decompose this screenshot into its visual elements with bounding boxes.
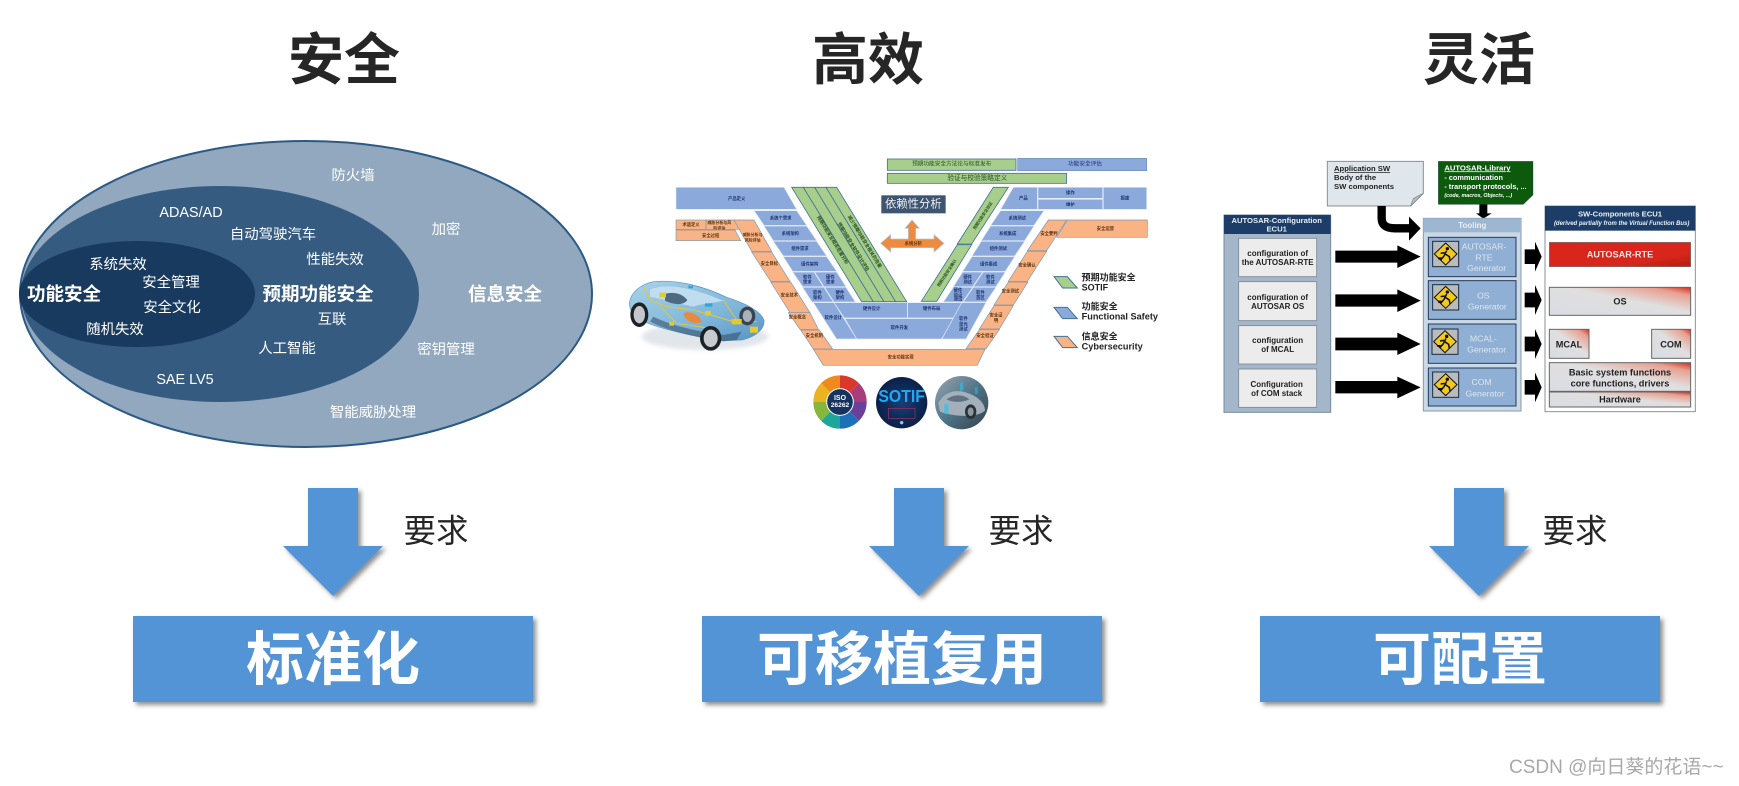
ellipse labels: 互联 — [318, 311, 346, 328]
note: application SW — [1327, 161, 1423, 206]
note: application SW: Body of the — [1334, 173, 1376, 182]
orange right strips — [966, 220, 1147, 349]
green diagonal right strips: 预期功能安全确认 — [935, 258, 957, 288]
blue right: test strips: 软件 — [986, 274, 995, 279]
blue right: test strips: 维护 — [1066, 201, 1075, 208]
ellipse labels: SAE LV5 — [156, 372, 214, 388]
blue left: product definition and requirements: 架构 — [813, 293, 822, 300]
icon: ISO 26262 badge: ISO — [834, 395, 847, 402]
blue left: product definition and requirements: 软件 — [803, 274, 812, 279]
orange left strips: 安全概念 — [789, 313, 807, 320]
green diagonal left strips — [792, 187, 907, 302]
ellipse labels: 安全文化 — [143, 298, 201, 316]
ECU1 component stack: COM — [1660, 339, 1682, 349]
label: 要求 1: 要求 — [403, 513, 469, 549]
blue right: test strips: 验证 — [954, 291, 963, 298]
ECU1 component stack: MCAL — [1556, 339, 1583, 349]
box: 可移植复用 — [702, 616, 1102, 702]
arrow: 灵活 requirement — [1429, 488, 1529, 596]
panel: tooling generators: Generator — [1467, 263, 1506, 273]
inner ellipse: 功能安全 — [19, 241, 255, 347]
orange left strips: 安全功能实现 — [888, 353, 914, 360]
blue right: test strips: 单元 — [959, 320, 968, 327]
blue right: test strips: 首区 — [976, 293, 985, 300]
blue right: test strips: 软件 — [959, 316, 968, 321]
panel: SW components — [1525, 206, 1695, 412]
blue left: product definition and requirements: 架构 — [836, 293, 845, 300]
box: 标准化 — [133, 616, 533, 702]
orange right strips: 安全确认 — [1018, 261, 1036, 268]
panel: AUTOSAR configuration: configuration — [1252, 336, 1303, 345]
box: 可配置 — [1260, 616, 1660, 702]
blue left: product definition and requirements: 软件开发 — [891, 324, 909, 331]
legend — [1054, 272, 1159, 352]
panel: AUTOSAR configuration: Configuration — [1250, 380, 1303, 389]
blue right: test strips: 测试 — [986, 278, 995, 285]
middle ellipse: 预期功能安全 — [21, 186, 419, 402]
title: 高效: 高效 — [812, 28, 924, 92]
legend: 功能安全 — [1082, 300, 1118, 311]
panel: tooling generators: AUTOSAR- — [1462, 242, 1506, 252]
panel: tooling generators: Tooling — [1458, 221, 1487, 230]
panel: AUTOSAR configuration: AUTOSAR OS — [1251, 302, 1305, 311]
blue right: test strips: 软件 — [976, 290, 985, 295]
blue left: product definition and requirements: 系统架构 — [782, 230, 800, 237]
icon: electric car — [629, 281, 768, 351]
orange left strips: 安全过程 — [702, 232, 720, 239]
blue left: product definition and requirements: 硬件布局 — [923, 305, 941, 312]
blue left: product definition and requirements: 需求 — [826, 278, 835, 285]
arrow: 高效 requirement — [869, 488, 969, 596]
panel: tooling generators — [1423, 218, 1521, 411]
blue right: test strips: 测试 — [954, 295, 963, 302]
panel: tooling generators: Generator — [1466, 388, 1505, 398]
icon: SOTIF badge: SOTIF — [878, 386, 925, 406]
ECU1 component stack: Hardware — [1599, 394, 1641, 404]
orange right strips: 安全验证 — [976, 332, 994, 339]
panel: AUTOSAR configuration: of COM stack — [1251, 389, 1303, 398]
arrows: configuration to generators — [1335, 245, 1421, 398]
orange left strips: 安全目标 — [761, 260, 779, 267]
panel: tooling generators: OS — [1477, 290, 1490, 300]
orange right strips: 安全运营 — [1097, 225, 1115, 232]
panel: AUTOSAR configuration: configuration of — [1247, 249, 1308, 258]
ellipse labels — [27, 167, 542, 421]
note: application SW: Application SW — [1334, 164, 1391, 173]
note: AUTOSAR library: AUTOSAR-Library — [1444, 163, 1511, 172]
label: 要求 2: 要求 — [988, 513, 1054, 549]
ellipse labels: 系统失效 — [89, 256, 147, 273]
green diagonal left strips: 预期功能安全相关危害分析 — [815, 214, 850, 266]
blue left: product definition and requirements: 组件需求 — [791, 245, 809, 252]
ellipse labels: 密钥管理 — [417, 341, 475, 358]
blue right: test strips: 组件测试 — [990, 245, 1008, 252]
watermark: CSDN @向日葵的花语~~ — [1509, 756, 1724, 778]
ellipse labels: 加密 — [432, 221, 460, 238]
blue right: test strips: 产品 — [1019, 194, 1028, 201]
outer ellipse: 信息安全 — [20, 141, 592, 447]
top bars: 预期功能安全方法论与标准发布 — [912, 160, 992, 168]
note: AUTOSAR library: - transport protocols, ... — [1444, 182, 1527, 191]
panel: tooling generators: COM — [1472, 377, 1492, 387]
ellipse labels: ADAS/AD — [159, 205, 223, 221]
arrow: system analysis: 系统分析 — [905, 240, 923, 247]
note: AUTOSAR library: (code, macros, Objects, ...) — [1444, 193, 1512, 199]
note: AUTOSAR library: - communication — [1444, 173, 1503, 182]
panel: tooling generators: Generator — [1467, 345, 1506, 355]
orange right strips: 明 — [994, 317, 999, 323]
panel: AUTOSAR workflow — [1224, 161, 1533, 412]
blue left: product definition and requirements: 硬件设计 — [863, 305, 881, 312]
blue left: product definition and requirements: 系统个需求 — [770, 214, 792, 221]
box: 可配置: 可配置 — [1373, 628, 1547, 692]
ellipse labels: 人工智能 — [258, 340, 316, 357]
ellipse labels: 自动驾驶汽车 — [230, 226, 316, 243]
note: application SW: SW components — [1334, 182, 1394, 191]
green diagonal left strips: 减少预期功能安全相关的危害 — [846, 214, 884, 270]
orange left strips: 安全机制 — [806, 332, 824, 339]
blue left: product definition and requirements: 组件架构 — [801, 260, 819, 267]
legend: 信息安全 — [1082, 331, 1118, 342]
legend: Functional Safety — [1082, 311, 1159, 321]
arrows: generators to components — [1525, 242, 1542, 402]
blue right: test strips: 测试 — [963, 278, 973, 285]
panel: AUTOSAR configuration: of MCAL — [1261, 345, 1294, 354]
panel: AUTOSAR configuration: configuration of — [1247, 293, 1308, 302]
ellipse labels: 性能失效 — [306, 251, 364, 268]
orange left strips: 安全技术 — [781, 291, 799, 298]
panel: tooling generators: MCAL- — [1470, 334, 1497, 344]
blue left: product definition and requirements: 软件 — [813, 290, 822, 295]
title: 安全: 安全 — [288, 28, 400, 92]
blue right: test strips: 报废 — [1121, 194, 1130, 201]
ellipse labels: 随机失效 — [86, 321, 144, 338]
blue left: product definition and requirements — [676, 187, 962, 339]
blue left: product definition and requirements: 需求 — [803, 278, 812, 285]
top bars: 验证与校验策略定义 — [947, 173, 1008, 182]
title: 灵活: 灵活 — [1423, 28, 1535, 92]
orange left strips: 威胁分析与风 — [707, 220, 731, 225]
ECU1 component stack: OS — [1613, 296, 1627, 306]
arrow: 安全 requirement — [283, 488, 383, 596]
icon: ISO 26262 badge: 26262 — [831, 402, 850, 409]
orange left strips: 威胁分析与 — [743, 232, 763, 237]
blue left: product definition and requirements: 软件设计 — [825, 314, 843, 321]
ECU1 component stack — [1545, 206, 1695, 412]
ellipse labels: 智能威胁处理 — [330, 404, 416, 421]
panel: V model diagram — [629, 158, 1159, 430]
blue left: product definition and requirements: 硬件 — [836, 290, 844, 295]
arrow: application SW to tooling — [1382, 206, 1421, 241]
orange right strips: 安全要判 — [1040, 230, 1058, 237]
ECU1 component stack: SW-Components ECU1 — [1578, 209, 1663, 218]
label: 要求 3: 要求 — [1542, 513, 1608, 549]
top bars — [887, 158, 1147, 183]
blue left: product definition and requirements: 产品定义 — [728, 195, 746, 202]
arrow: system analysis — [881, 220, 944, 252]
orange right strips: 安全证 — [990, 312, 1002, 317]
dependency analysis label — [881, 195, 946, 213]
legend: 预期功能安全 — [1082, 272, 1136, 283]
blue right: test strips: 硬件 — [963, 274, 972, 279]
panel: AUTOSAR configuration — [1224, 215, 1331, 412]
blue right: test strips: 系统集成 — [999, 230, 1017, 237]
panel: AUTOSAR configuration: AUTOSAR-Configuration — [1231, 216, 1322, 225]
ECU1 component stack: AUTOSAR-RTE — [1587, 250, 1653, 260]
green diagonal left strips: 预期功能安全软件设计评估 — [836, 221, 871, 273]
blue right: test strips: 测试 — [959, 325, 968, 332]
box: 标准化: 标准化 — [246, 628, 420, 692]
icon: SOTIF badge — [876, 377, 927, 428]
blue right: test strips: 组件集成 — [980, 260, 998, 267]
panel: AUTOSAR configuration: the AUTOSAR-RTE — [1242, 258, 1314, 267]
blue left: product definition and requirements: 硬件 — [826, 274, 835, 279]
ellipse labels: 信息安全 — [468, 284, 542, 304]
orange left strips: 术语定义 — [682, 221, 700, 228]
note: AUTOSAR library — [1438, 161, 1533, 204]
green diagonal right strips — [921, 187, 1008, 301]
icon: ISO 26262 badge — [812, 374, 868, 430]
blue right: test strips: 系统测试 — [1009, 214, 1027, 221]
ECU1 component stack: core functions, drivers — [1571, 379, 1669, 389]
orange left strips — [676, 219, 985, 365]
dependency analysis label: 依赖性分析 — [885, 197, 942, 211]
blue right: test strips: 操作 — [1066, 189, 1075, 196]
ECU1 component stack: Basic system functions — [1569, 368, 1671, 378]
arrow: library to tooling — [1476, 204, 1492, 219]
top bars: 功能安全评估 — [1068, 160, 1102, 168]
blue right: test strips — [942, 187, 1147, 339]
box: 可移植复用: 可移植复用 — [757, 628, 1047, 692]
blue right: test strips: 硬件 — [954, 287, 962, 292]
legend: SOTIF — [1082, 283, 1109, 293]
panel: nested safety ellipses — [19, 141, 592, 447]
icon: digital car badge — [935, 376, 988, 429]
green diagonal right strips: 预期功能安全验证 — [971, 200, 993, 230]
orange right strips: 安全测试 — [1002, 287, 1020, 294]
orange left strips: 险评估 — [713, 224, 725, 230]
panel: tooling generators: RTE — [1475, 252, 1493, 262]
panel: AUTOSAR configuration: ECU1 — [1266, 224, 1288, 233]
ellipse labels: 预期功能安全 — [262, 284, 374, 304]
ellipse labels: 防火墙 — [331, 167, 375, 184]
orange left strips: 风险评估 — [745, 236, 761, 242]
ECU1 component stack: (derived partially from the Virtual Function Bus) — [1554, 221, 1689, 227]
panel: tooling generators: Generator — [1468, 302, 1507, 312]
ellipse labels: 功能安全 — [27, 284, 101, 304]
legend: Cybersecurity — [1082, 342, 1144, 352]
ellipse labels: 安全管理 — [142, 273, 200, 291]
